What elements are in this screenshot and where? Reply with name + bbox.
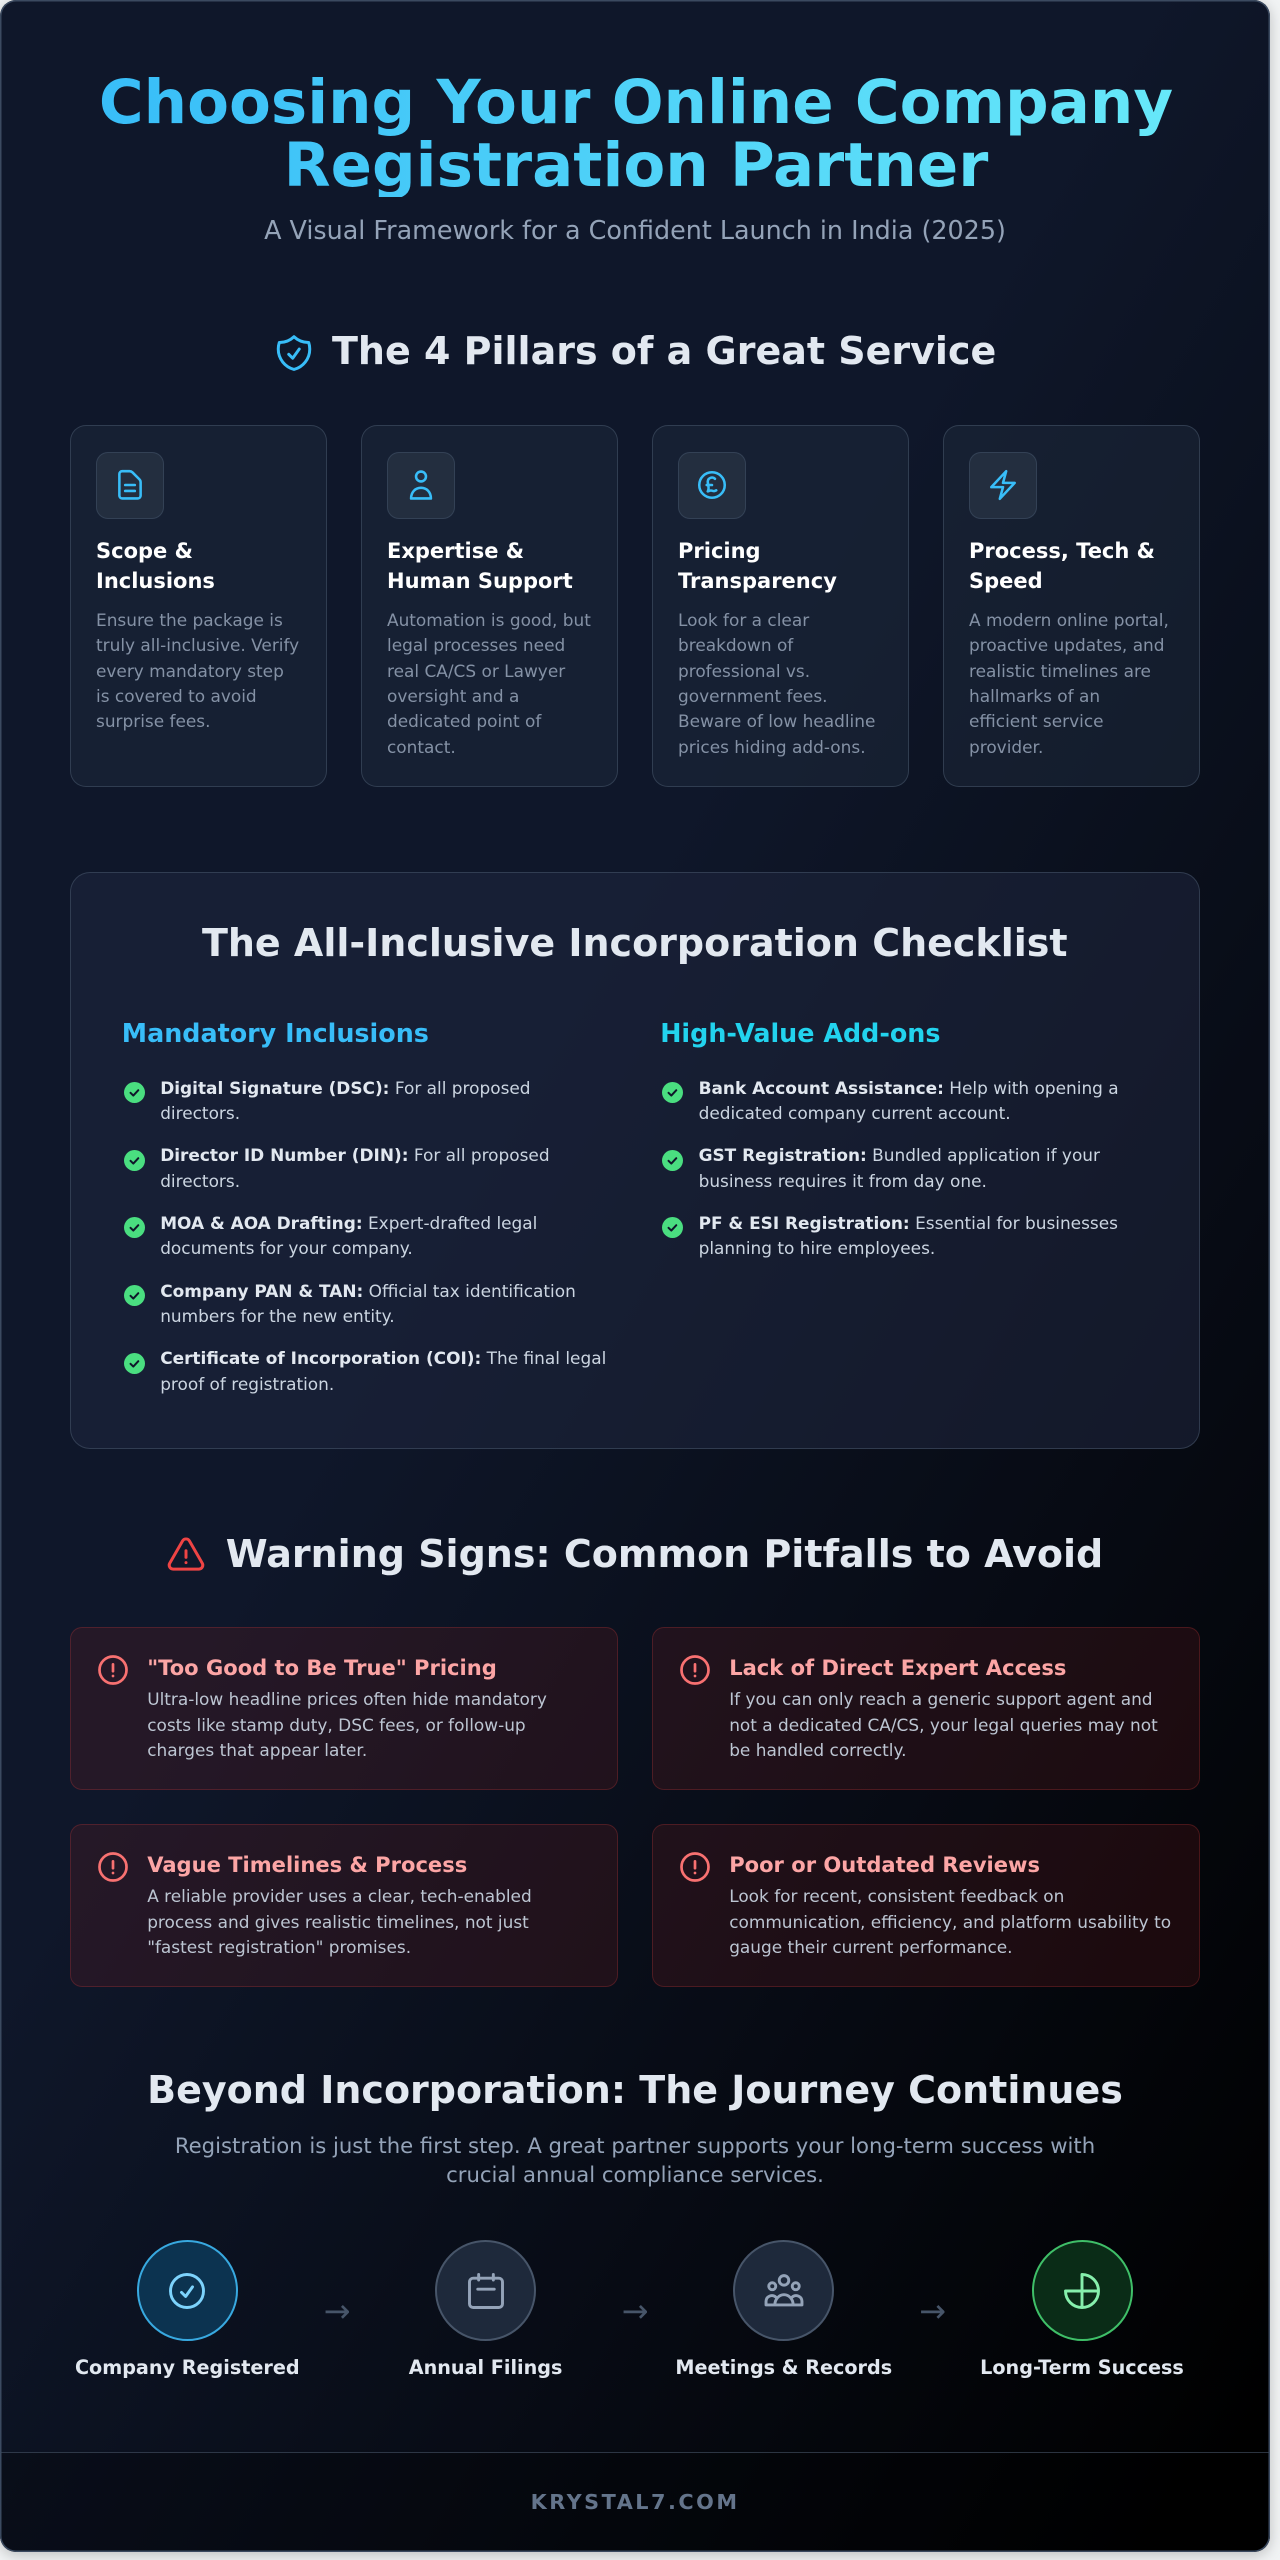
- checklist item: DIN: directors.: [160, 1171, 240, 1191]
- checklist item: PF and ESI: PF & ESI Registration: Essential for businesses: [699, 1213, 1118, 1233]
- checklist item: bank account: dedicated company current account.: [699, 1103, 1011, 1123]
- step label: Company Registered: [75, 2356, 300, 2379]
- card text: oversight and a: [387, 686, 519, 706]
- icon: group of people: [733, 2240, 834, 2341]
- card title: Scope &: [96, 539, 193, 563]
- checklist item: PAN and TAN: [124, 1281, 576, 1326]
- heading: warning signs: Warning Signs: Common Pitfalls to Avoid: [226, 1532, 1103, 1576]
- checklist item: PAN and TAN: numbers for the new entity.: [160, 1306, 395, 1326]
- warning text: [729, 1886, 1171, 1957]
- warning text: be handled correctly.: [729, 1740, 906, 1760]
- warning text: [729, 1689, 1158, 1760]
- checklist item: COI: [124, 1348, 606, 1394]
- icon: warning triangle: [168, 1538, 204, 1571]
- panel: expertise and human support: [361, 425, 618, 787]
- warning text: Ultra-low headline prices often hide mandatory: [147, 1689, 547, 1709]
- heading: the 4 pillars: The 4 Pillars of a Great Service: [332, 329, 996, 373]
- warning text: A reliable provider uses a clear, tech-enabled: [147, 1886, 532, 1906]
- checklist item: GST: business requires it from day one.: [699, 1171, 987, 1191]
- panel: pricing transparency: [652, 425, 908, 787]
- journey intro text: [175, 2133, 1095, 2187]
- card text: dedicated point of: [387, 711, 541, 731]
- card title: [387, 539, 573, 593]
- footer: [0, 2452, 1270, 2552]
- card text: is covered to avoid: [96, 686, 257, 706]
- card title: Pricing: [678, 539, 761, 563]
- icon: check circle: [137, 2240, 238, 2341]
- journey intro text: crucial annual compliance services.: [446, 2162, 824, 2187]
- step: company registered: [75, 2240, 300, 2379]
- title: Choosing Your Online Company: [99, 67, 1173, 138]
- checklist item: DSC: directors.: [160, 1103, 240, 1123]
- icon: alert circle: [680, 1852, 710, 1882]
- card title: Expertise &: [387, 539, 524, 563]
- card title: Speed: [969, 569, 1043, 593]
- checklist item: MOA and AOA: MOA & AOA Drafting: Expert-drafted legal: [160, 1213, 537, 1233]
- warning text: [147, 1689, 547, 1760]
- warning text: gauge their current performance.: [729, 1937, 1013, 1957]
- warning text: If you can only reach a generic support agent and: [729, 1689, 1153, 1709]
- card text: [387, 610, 591, 757]
- step: long-term success: [980, 2240, 1184, 2379]
- icon: pie chart: [1032, 2240, 1132, 2341]
- checklist item: bank account: [662, 1078, 1119, 1123]
- step label: Long-Term Success: [980, 2356, 1184, 2379]
- checklist item: DSC: Digital Signature (DSC): For all proposed: [160, 1078, 531, 1098]
- card title: [969, 539, 1155, 593]
- warning text: charges that appear later.: [147, 1740, 367, 1760]
- icon: alert circle: [680, 1655, 710, 1685]
- card text: real CA/CS or Lawyer: [387, 661, 565, 681]
- checklist item: PF and ESI: [662, 1213, 1118, 1258]
- icon: pound coin: [678, 452, 746, 519]
- panel: process, tech and speed: [943, 425, 1200, 787]
- card text: realistic timelines are: [969, 661, 1151, 681]
- checklist item: DIN: Director ID Number (DIN): For all proposed: [160, 1145, 550, 1165]
- checklist item: COI: Certificate of Incorporation (COI): The final legal: [160, 1348, 606, 1368]
- warning title: "Too Good to Be True" Pricing: [147, 1655, 497, 1680]
- panel: scope and inclusions: [70, 425, 326, 787]
- checklist item: DIN: [124, 1145, 550, 1191]
- step label: Meetings & Records: [675, 2356, 892, 2379]
- panel: vague timelines and process: [70, 1824, 618, 1987]
- card text: every mandatory step: [96, 661, 284, 681]
- card text: Ensure the package is: [96, 610, 283, 630]
- card title: Transparency: [678, 569, 837, 593]
- panel: lack of direct expert access: [652, 1627, 1200, 1790]
- checklist item: MOA and AOA: [124, 1213, 537, 1258]
- icon: lightning bolt: [969, 452, 1037, 519]
- checklist item: DSC: [124, 1078, 531, 1123]
- warning text: [147, 1886, 532, 1957]
- step: annual filings: [408, 2240, 562, 2379]
- icon: person: [387, 452, 455, 519]
- card text: breakdown of: [678, 635, 793, 655]
- warning title: Lack of Direct Expert Access: [729, 1655, 1066, 1680]
- card text: truly all-inclusive. Verify: [96, 635, 299, 655]
- subtitle: A Visual Framework for a Confident Launch in India (2025): [264, 214, 1006, 244]
- step label: Annual Filings: [409, 2356, 562, 2379]
- card title: Process, Tech &: [969, 539, 1155, 563]
- card text: A modern online portal,: [969, 610, 1169, 630]
- card text: surprise fees.: [96, 711, 210, 731]
- step: meetings and records: [675, 2240, 892, 2379]
- title: Registration Partner: [284, 130, 988, 201]
- checklist item: bank account: Bank Account Assistance: Help with opening a: [699, 1078, 1119, 1098]
- warning text: process and gives realistic timelines, not just: [147, 1912, 529, 1932]
- arrow: →: [622, 2292, 648, 2330]
- heading: high-value add-ons: High-Value Add-ons: [660, 1018, 940, 1048]
- heading: beyond incorporation: Beyond Incorporation: The Journey Continues: [147, 2068, 1123, 2112]
- warning text: communication, efficiency, and platform usability to: [729, 1912, 1171, 1932]
- checklist item: GST: GST Registration: Bundled application if your: [699, 1145, 1100, 1165]
- warning text: not a dedicated CA/CS, your legal queries may not: [729, 1714, 1158, 1734]
- icon: shield check: [276, 335, 312, 371]
- checklist item: PAN and TAN: Company PAN & TAN: Official tax identification: [160, 1281, 576, 1301]
- warning title: Vague Timelines & Process: [147, 1852, 467, 1877]
- card text: [678, 610, 875, 757]
- card text: provider.: [969, 737, 1043, 757]
- card text: legal processes need: [387, 635, 565, 655]
- card text: Automation is good, but: [387, 610, 591, 630]
- card text: Beware of low headline: [678, 711, 875, 731]
- warning text: costs like stamp duty, DSC fees, or follow-up: [147, 1714, 526, 1734]
- panel: incorporation checklist: [70, 872, 1200, 1449]
- warning title: Poor or Outdated Reviews: [729, 1852, 1040, 1877]
- card text: hallmarks of an: [969, 686, 1100, 706]
- icon: alert circle: [98, 1655, 128, 1685]
- card text: efficient service: [969, 711, 1104, 731]
- icon: document: [96, 452, 164, 519]
- checklist item: COI: proof of registration.: [160, 1374, 334, 1394]
- title: [97, 71, 1175, 197]
- checklist item: MOA and AOA: documents for your company.: [160, 1238, 413, 1258]
- card text: contact.: [387, 737, 456, 757]
- card text: [969, 610, 1169, 757]
- icon: alert circle: [98, 1852, 128, 1882]
- panel: poor or outdated reviews: [652, 1824, 1200, 1987]
- warning text: "fastest registration" promises.: [147, 1937, 411, 1957]
- arrow: →: [324, 2292, 350, 2330]
- card title: [96, 539, 215, 593]
- footer brand: KRYSTAL7.COM: [531, 2490, 740, 2514]
- warning text: Look for recent, consistent feedback on: [729, 1886, 1064, 1906]
- card text: government fees.: [678, 686, 828, 706]
- journey intro text: Registration is just the first step. A great partner supports your long-term success with: [175, 2133, 1095, 2158]
- card title: [678, 539, 837, 593]
- icon: calendar: [435, 2240, 536, 2341]
- checklist item: PF and ESI: planning to hire employees.: [699, 1238, 935, 1258]
- card title: Inclusions: [96, 569, 215, 593]
- card text: proactive updates, and: [969, 635, 1165, 655]
- arrow: →: [919, 2292, 946, 2330]
- card text: prices hiding add-ons.: [678, 737, 866, 757]
- card text: Look for a clear: [678, 610, 809, 630]
- panel: too good to be true pricing: [70, 1627, 618, 1790]
- card text: [96, 610, 299, 731]
- card title: Human Support: [387, 569, 573, 593]
- heading: checklist: The All-Inclusive Incorporation Checklist: [202, 921, 1068, 965]
- checklist item: GST: [662, 1145, 1100, 1191]
- heading: mandatory inclusions: Mandatory Inclusions: [122, 1018, 429, 1048]
- card text: professional vs.: [678, 661, 810, 681]
